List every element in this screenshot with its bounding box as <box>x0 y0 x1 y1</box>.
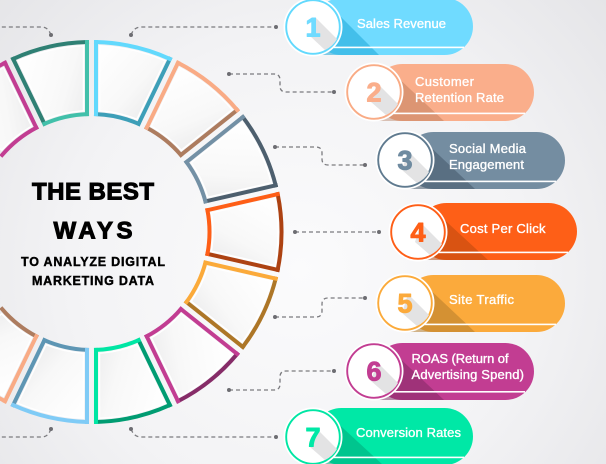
ring segment 14: teal <box>13 27 115 133</box>
connector: social media <box>273 145 367 167</box>
ring segment 9: peach <box>0 295 41 401</box>
ring segment 6: ROAS <box>127 303 237 412</box>
label: ROAS (Return of <box>412 351 509 366</box>
connector: cost per click <box>293 230 381 234</box>
number 3: 3 <box>397 146 413 176</box>
number 1: 1 <box>305 12 321 42</box>
pill 2: customer retention rate: Retention Rate <box>415 90 504 105</box>
title line: ways: WAYS <box>54 218 132 245</box>
label: Conversion Rates <box>356 425 462 440</box>
ring segment 7: conversion rates <box>68 331 170 437</box>
label: Site Traffic <box>449 292 514 307</box>
subtitle line 2: MARKETING DATA <box>32 274 154 288</box>
ring segment 13: magenta <box>0 52 56 161</box>
ring segment 3: social media <box>179 117 289 226</box>
label: Sales Revenue <box>357 16 446 31</box>
ring segment 1: sales revenue <box>96 42 170 124</box>
segmented ring <box>0 27 294 437</box>
label: Cost Per Click <box>460 221 546 236</box>
label: Social Media <box>449 141 527 156</box>
pill 5: site traffic <box>376 274 565 332</box>
connector: conversion rates <box>129 427 278 439</box>
pill 6: ROAS: Advertising Spend) <box>412 367 524 382</box>
subtitle line 1: TO ANALYZE DIGITAL <box>21 255 165 269</box>
connector: site traffic <box>273 296 367 319</box>
number 4: 4 <box>410 218 426 248</box>
number 6: 6 <box>366 356 382 386</box>
ring segment 8: light blue <box>13 340 87 422</box>
pill 3: social media engagement: Engagement <box>449 157 524 172</box>
connector: bottom left <box>0 427 53 437</box>
ring segment 4: cost per click <box>198 194 294 284</box>
pill 2: customer retention rate <box>344 62 534 122</box>
pill 7: conversion rates <box>284 408 473 464</box>
connector: customer retention <box>227 72 336 94</box>
connector: ROAS <box>227 369 336 392</box>
pill 1: sales revenue <box>284 0 473 56</box>
number 2: 2 <box>366 78 382 108</box>
connector: top left <box>0 27 53 37</box>
pill 4: cost per click <box>388 202 577 262</box>
title line: the best: THE BEST <box>32 179 154 206</box>
pill 6: ROAS <box>344 342 534 400</box>
number 5: 5 <box>397 288 413 318</box>
number 7: 7 <box>305 422 321 452</box>
ring segment 2: customer retention <box>142 63 245 169</box>
pill 3: social media engagement <box>376 130 565 190</box>
label: Customer <box>415 74 475 89</box>
title <box>21 179 165 288</box>
ring segment 5: site traffic <box>180 260 276 351</box>
connector: sales revenue <box>129 25 278 37</box>
